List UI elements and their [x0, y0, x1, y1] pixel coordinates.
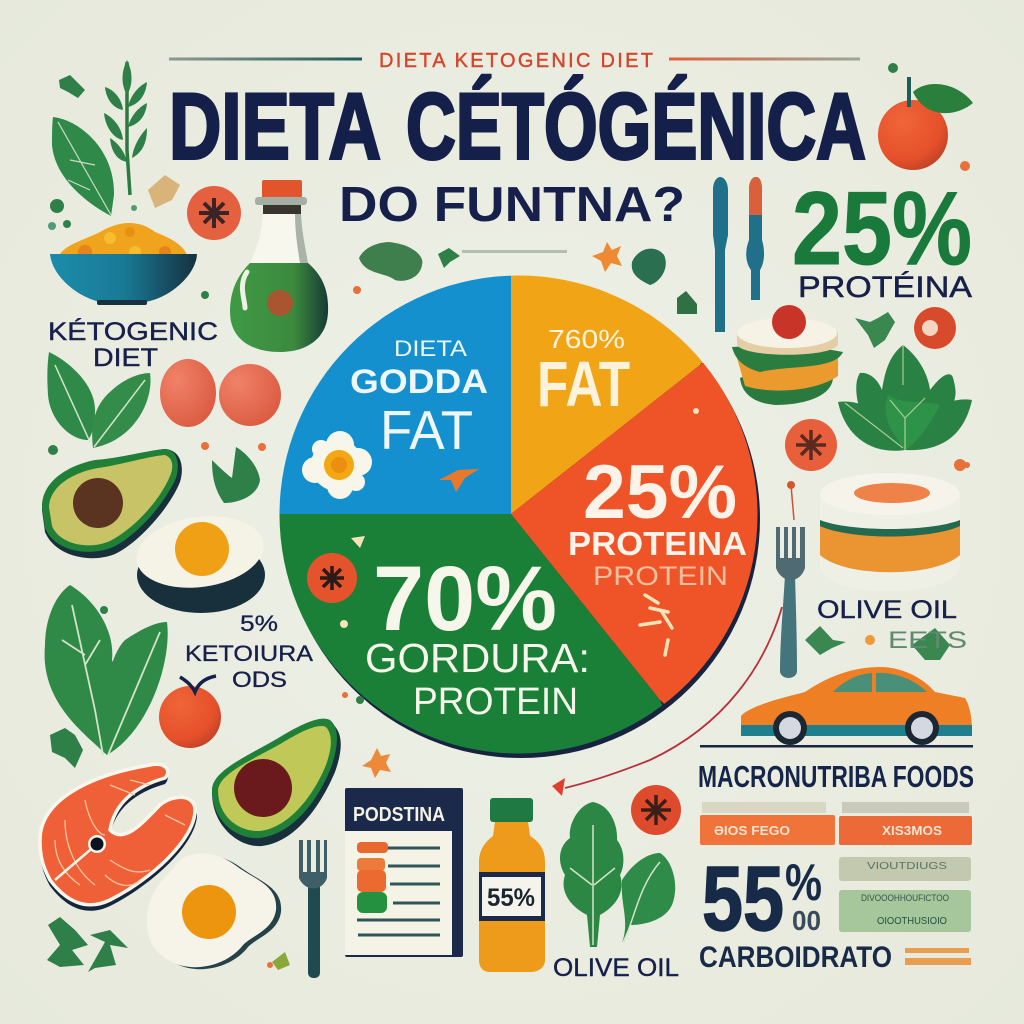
label: ketogenic diet	[48, 317, 218, 372]
label: ketoiura ods: 5%	[240, 611, 278, 636]
label: ketogenic diet: DIET	[93, 344, 158, 372]
icon: oil bottle	[479, 798, 545, 972]
icon: egg half	[132, 508, 268, 613]
pie label: red: PROTEIN	[593, 561, 728, 591]
stat: 55% carbs: %	[785, 854, 822, 912]
table: macronutrient bars: VIOUTDIUGS	[867, 861, 947, 872]
icon: bowl of food	[50, 223, 197, 305]
icon: egg flower	[302, 431, 372, 499]
icon: green herb	[212, 447, 260, 503]
icon: tomato with leaf	[878, 77, 973, 170]
table: macronutrient bars: DIVOOOHHOUFICTOO	[861, 893, 949, 903]
pie chart	[280, 276, 760, 758]
pie label: yellow	[537, 324, 630, 420]
decorative orange text lines	[905, 948, 971, 965]
title	[169, 74, 866, 178]
panel: clipboard	[345, 788, 463, 957]
stat: 55% carbs: CARBOIDRATO	[699, 941, 892, 974]
label: ketogenic diet: KÉTOGENIC	[48, 317, 218, 346]
icon: fork	[299, 840, 327, 978]
icon: orange flower	[592, 242, 622, 272]
icon: avocado lower	[212, 719, 341, 846]
title: DIETA	[169, 74, 381, 178]
icon: tomato slice lower right	[631, 785, 681, 835]
stat: 55% carbs: 55	[702, 848, 784, 950]
icon: avocado half	[42, 449, 182, 558]
pie label: green: 70%	[373, 548, 557, 650]
pie label: red	[568, 450, 747, 591]
icon: tomato slice right	[785, 419, 837, 471]
icon: leaves bottom-left	[47, 728, 128, 972]
pie label: green: PROTEIN	[413, 681, 578, 723]
pie label: green	[365, 548, 590, 723]
icon: small tomato right	[914, 307, 956, 349]
pie label: blue	[350, 336, 488, 461]
pie label: red: 25%	[583, 450, 737, 535]
small heading	[169, 50, 860, 72]
label: ketoiura ods: ODS	[232, 667, 287, 692]
icon: basil leaves	[47, 352, 151, 448]
divider	[700, 745, 973, 748]
icon: orange leaf	[439, 469, 479, 492]
icon: leaves with faded text	[805, 626, 967, 660]
table: macronutrient bars: OIOOTHUSIOIO	[877, 916, 947, 927]
icon: fried egg	[147, 853, 281, 969]
icon: spinach bottom left	[45, 585, 168, 755]
label: ketoiura ods	[185, 611, 313, 692]
icon: leaves with faded text: EETS	[888, 627, 967, 654]
pie label: green: GORDURA:	[365, 635, 590, 681]
subtitle: DO FUNTNA?	[339, 178, 685, 232]
pie label: yellow: FAT	[537, 348, 630, 420]
icon: orange flower lower	[362, 748, 391, 778]
icon: tomato slice	[307, 553, 357, 603]
icon: green bottle	[230, 180, 328, 352]
icon: sandwich	[732, 305, 843, 405]
icon: tomato slice top	[187, 186, 241, 240]
arrow: red curve	[552, 607, 782, 796]
confetti specks	[201, 161, 970, 968]
table: macronutrient bars: XIS3MOS	[882, 823, 942, 838]
line of faint text	[462, 250, 567, 253]
icon: fork right	[776, 481, 805, 678]
icon: stacked cake	[820, 473, 960, 591]
icon: oil bottle: 55%	[487, 884, 535, 912]
icon: herb sprig	[104, 60, 147, 195]
icon: large leafy greens	[838, 345, 972, 451]
icon: orange car	[741, 667, 972, 745]
icon: green herb right	[855, 312, 895, 348]
stat: 55% carbs	[699, 848, 892, 974]
icon: green leaf cluster	[359, 242, 697, 314]
table: macronutrient bars: ƏIOS FEGO	[714, 823, 790, 838]
label: olive oil lower: OLIVE OIL	[553, 954, 679, 982]
table: macronutrient bars	[700, 802, 972, 932]
title: CÉTÓGÉNICA	[406, 74, 866, 178]
stat: 25% protein: PROTÉINA	[798, 271, 972, 304]
icon: small leaves	[48, 75, 180, 230]
stat: 55% carbs: 00	[792, 905, 821, 936]
pie label: blue: GODDA	[350, 363, 488, 401]
panel: clipboard: PODSTINA	[353, 804, 445, 826]
pie label: blue: FAT	[380, 399, 473, 461]
icon: tomato bottom left	[159, 676, 221, 748]
pie label: red: PROTEINA	[568, 525, 747, 562]
icon: salmon steak	[40, 764, 197, 911]
stat: 25% protein: 25%	[792, 171, 972, 287]
pie label: yellow: 760%	[548, 324, 625, 354]
icon: spinach leaf top-left	[52, 117, 114, 216]
label: olive oil right: OLIVE OIL	[817, 596, 957, 624]
specks	[340, 408, 699, 655]
label: ketoiura ods: KETOIURA	[185, 641, 313, 666]
small heading: DIETA KETOGENIC DIET	[379, 50, 653, 72]
icon: spinach lower	[560, 802, 675, 947]
icon: knife and spoon top	[713, 177, 764, 332]
icon: two eggs	[160, 359, 281, 427]
pie label: blue: DIETA	[394, 336, 467, 361]
